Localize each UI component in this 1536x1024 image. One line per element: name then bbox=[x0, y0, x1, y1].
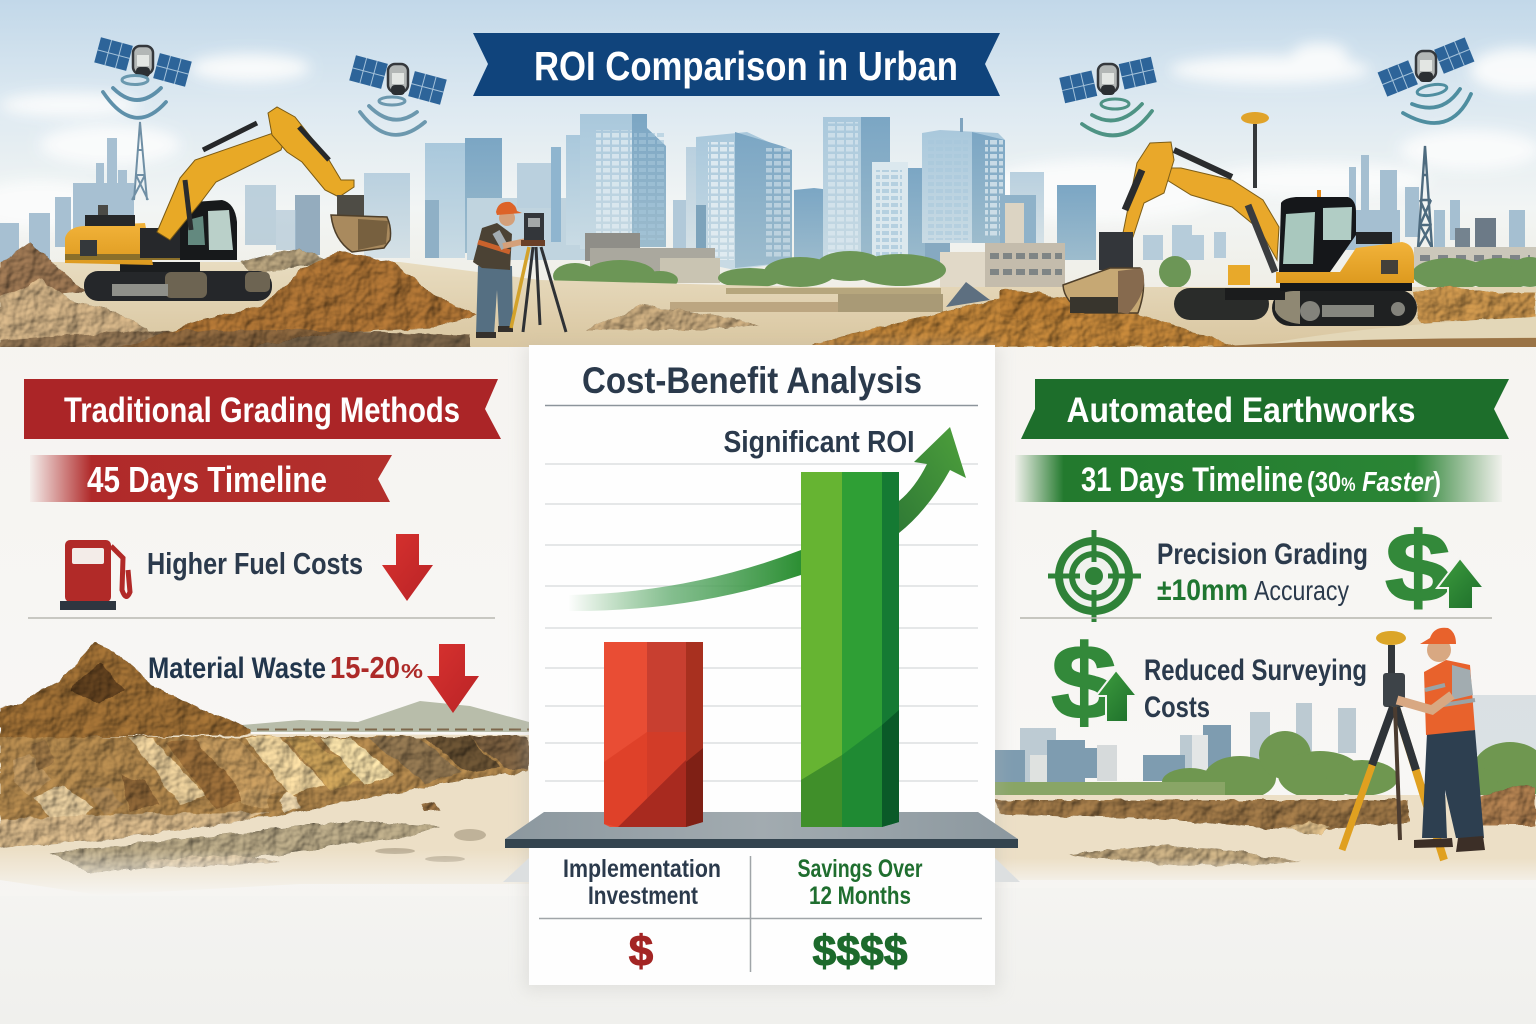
left scene: soil heap and cut embankment bbox=[0, 643, 529, 896]
value: 15-20%: % bbox=[401, 661, 423, 683]
text: 10mm accuracy: ±10mm bbox=[1157, 574, 1248, 607]
clouds bbox=[0, 43, 1536, 229]
red bar bbox=[604, 642, 703, 827]
tree lines bbox=[553, 251, 1536, 290]
arm bbox=[268, 107, 354, 197]
hero scene: sky, city and construction site bbox=[0, 0, 1536, 352]
excavator: traditional (left) bbox=[65, 107, 391, 301]
arm bbox=[1123, 142, 1174, 237]
timeline ribbon bbox=[1015, 455, 1502, 502]
heading ribbon bbox=[1021, 379, 1509, 439]
text: material waste: Material Waste bbox=[148, 652, 326, 685]
cab bbox=[180, 200, 237, 260]
icon: dollar with up arrow: $ bbox=[1385, 512, 1451, 622]
GNSS antenna bbox=[1241, 112, 1269, 124]
bucket bbox=[331, 215, 391, 252]
distant left skyline bbox=[0, 138, 320, 263]
icon: dollar with up arrow bbox=[1385, 512, 1484, 622]
right scene: skyline, trees, graded ground bbox=[995, 695, 1536, 888]
text: reduced surveying costs bbox=[1144, 654, 1367, 724]
low-rise buildings bbox=[585, 203, 1536, 287]
timeline ribbon: 31 Days Timeline bbox=[1081, 461, 1303, 499]
label: implementation investment bbox=[563, 855, 721, 910]
right panel: automated earthworks bbox=[1015, 379, 1509, 860]
growth arrow bbox=[568, 427, 966, 611]
surveyor with GNSS rover bbox=[1342, 628, 1485, 860]
body bbox=[1276, 242, 1414, 283]
heading ribbon: Automated Earthworks bbox=[1066, 391, 1416, 430]
text: reduced surveying costs: Costs bbox=[1144, 691, 1210, 724]
text: reduced surveying costs: Reduced Surveying bbox=[1144, 654, 1367, 687]
label: savings over 12 months: Savings Over bbox=[798, 855, 923, 883]
title banner bbox=[473, 33, 1000, 96]
counterweight and body bbox=[65, 223, 153, 265]
icon: down arrow bbox=[427, 644, 479, 713]
label: implementation investment: Investment bbox=[588, 882, 699, 910]
text: precision grading: Precision Grading bbox=[1157, 538, 1368, 571]
heading ribbon bbox=[24, 379, 501, 439]
icon: dollar with up arrow: $ bbox=[1051, 623, 1117, 741]
green bar bbox=[801, 472, 899, 827]
bucket bbox=[1063, 268, 1144, 313]
dollar rating: investment: $ bbox=[629, 927, 653, 976]
icon: down arrow bbox=[382, 534, 433, 601]
label: significant ROI: Significant ROI bbox=[724, 424, 914, 459]
signal arcs bbox=[103, 76, 1471, 135]
heading ribbon: Traditional Grading Methods bbox=[64, 391, 460, 430]
label: savings over 12 months bbox=[798, 855, 923, 910]
chart base bbox=[505, 812, 1018, 848]
boom bbox=[1164, 168, 1279, 260]
tracks bbox=[84, 271, 272, 301]
text: higher fuel costs: Higher Fuel Costs bbox=[147, 546, 363, 581]
label: savings over 12 months: 12 Months bbox=[809, 882, 911, 910]
surveyor with total station (hero) bbox=[473, 202, 566, 338]
timeline ribbon: 45 Days Timeline bbox=[87, 459, 327, 500]
cab bbox=[1279, 197, 1356, 272]
text: 10mm accuracy bbox=[1157, 574, 1349, 607]
tracks bbox=[1174, 288, 1269, 320]
label: implementation investment: Implementation bbox=[563, 855, 721, 883]
excavator: automated (right) bbox=[1063, 112, 1417, 326]
central towers bbox=[364, 114, 1096, 270]
central panel: cost-benefit analysis bbox=[503, 345, 1020, 991]
boom bbox=[157, 132, 285, 240]
left panel: traditional grading methods bbox=[24, 379, 501, 713]
panel heading: Cost-Benefit Analysis bbox=[582, 360, 922, 401]
title banner: ROI Comparison in Urban bbox=[534, 43, 958, 89]
distant right skyline bbox=[1340, 155, 1525, 250]
value: 15-20%: 15-20 bbox=[330, 650, 400, 685]
soil piles bbox=[0, 243, 1536, 352]
icon: fuel pump bbox=[60, 540, 130, 610]
icon: target bbox=[1048, 530, 1141, 622]
lattice towers bbox=[132, 122, 148, 200]
text: 10mm accuracy: Accuracy bbox=[1254, 575, 1349, 606]
timeline ribbon: (30% Faster) bbox=[1307, 466, 1441, 497]
dollar rating: savings: $$$$ bbox=[812, 927, 908, 976]
ground bbox=[0, 262, 1536, 348]
satellites bbox=[94, 37, 1474, 105]
